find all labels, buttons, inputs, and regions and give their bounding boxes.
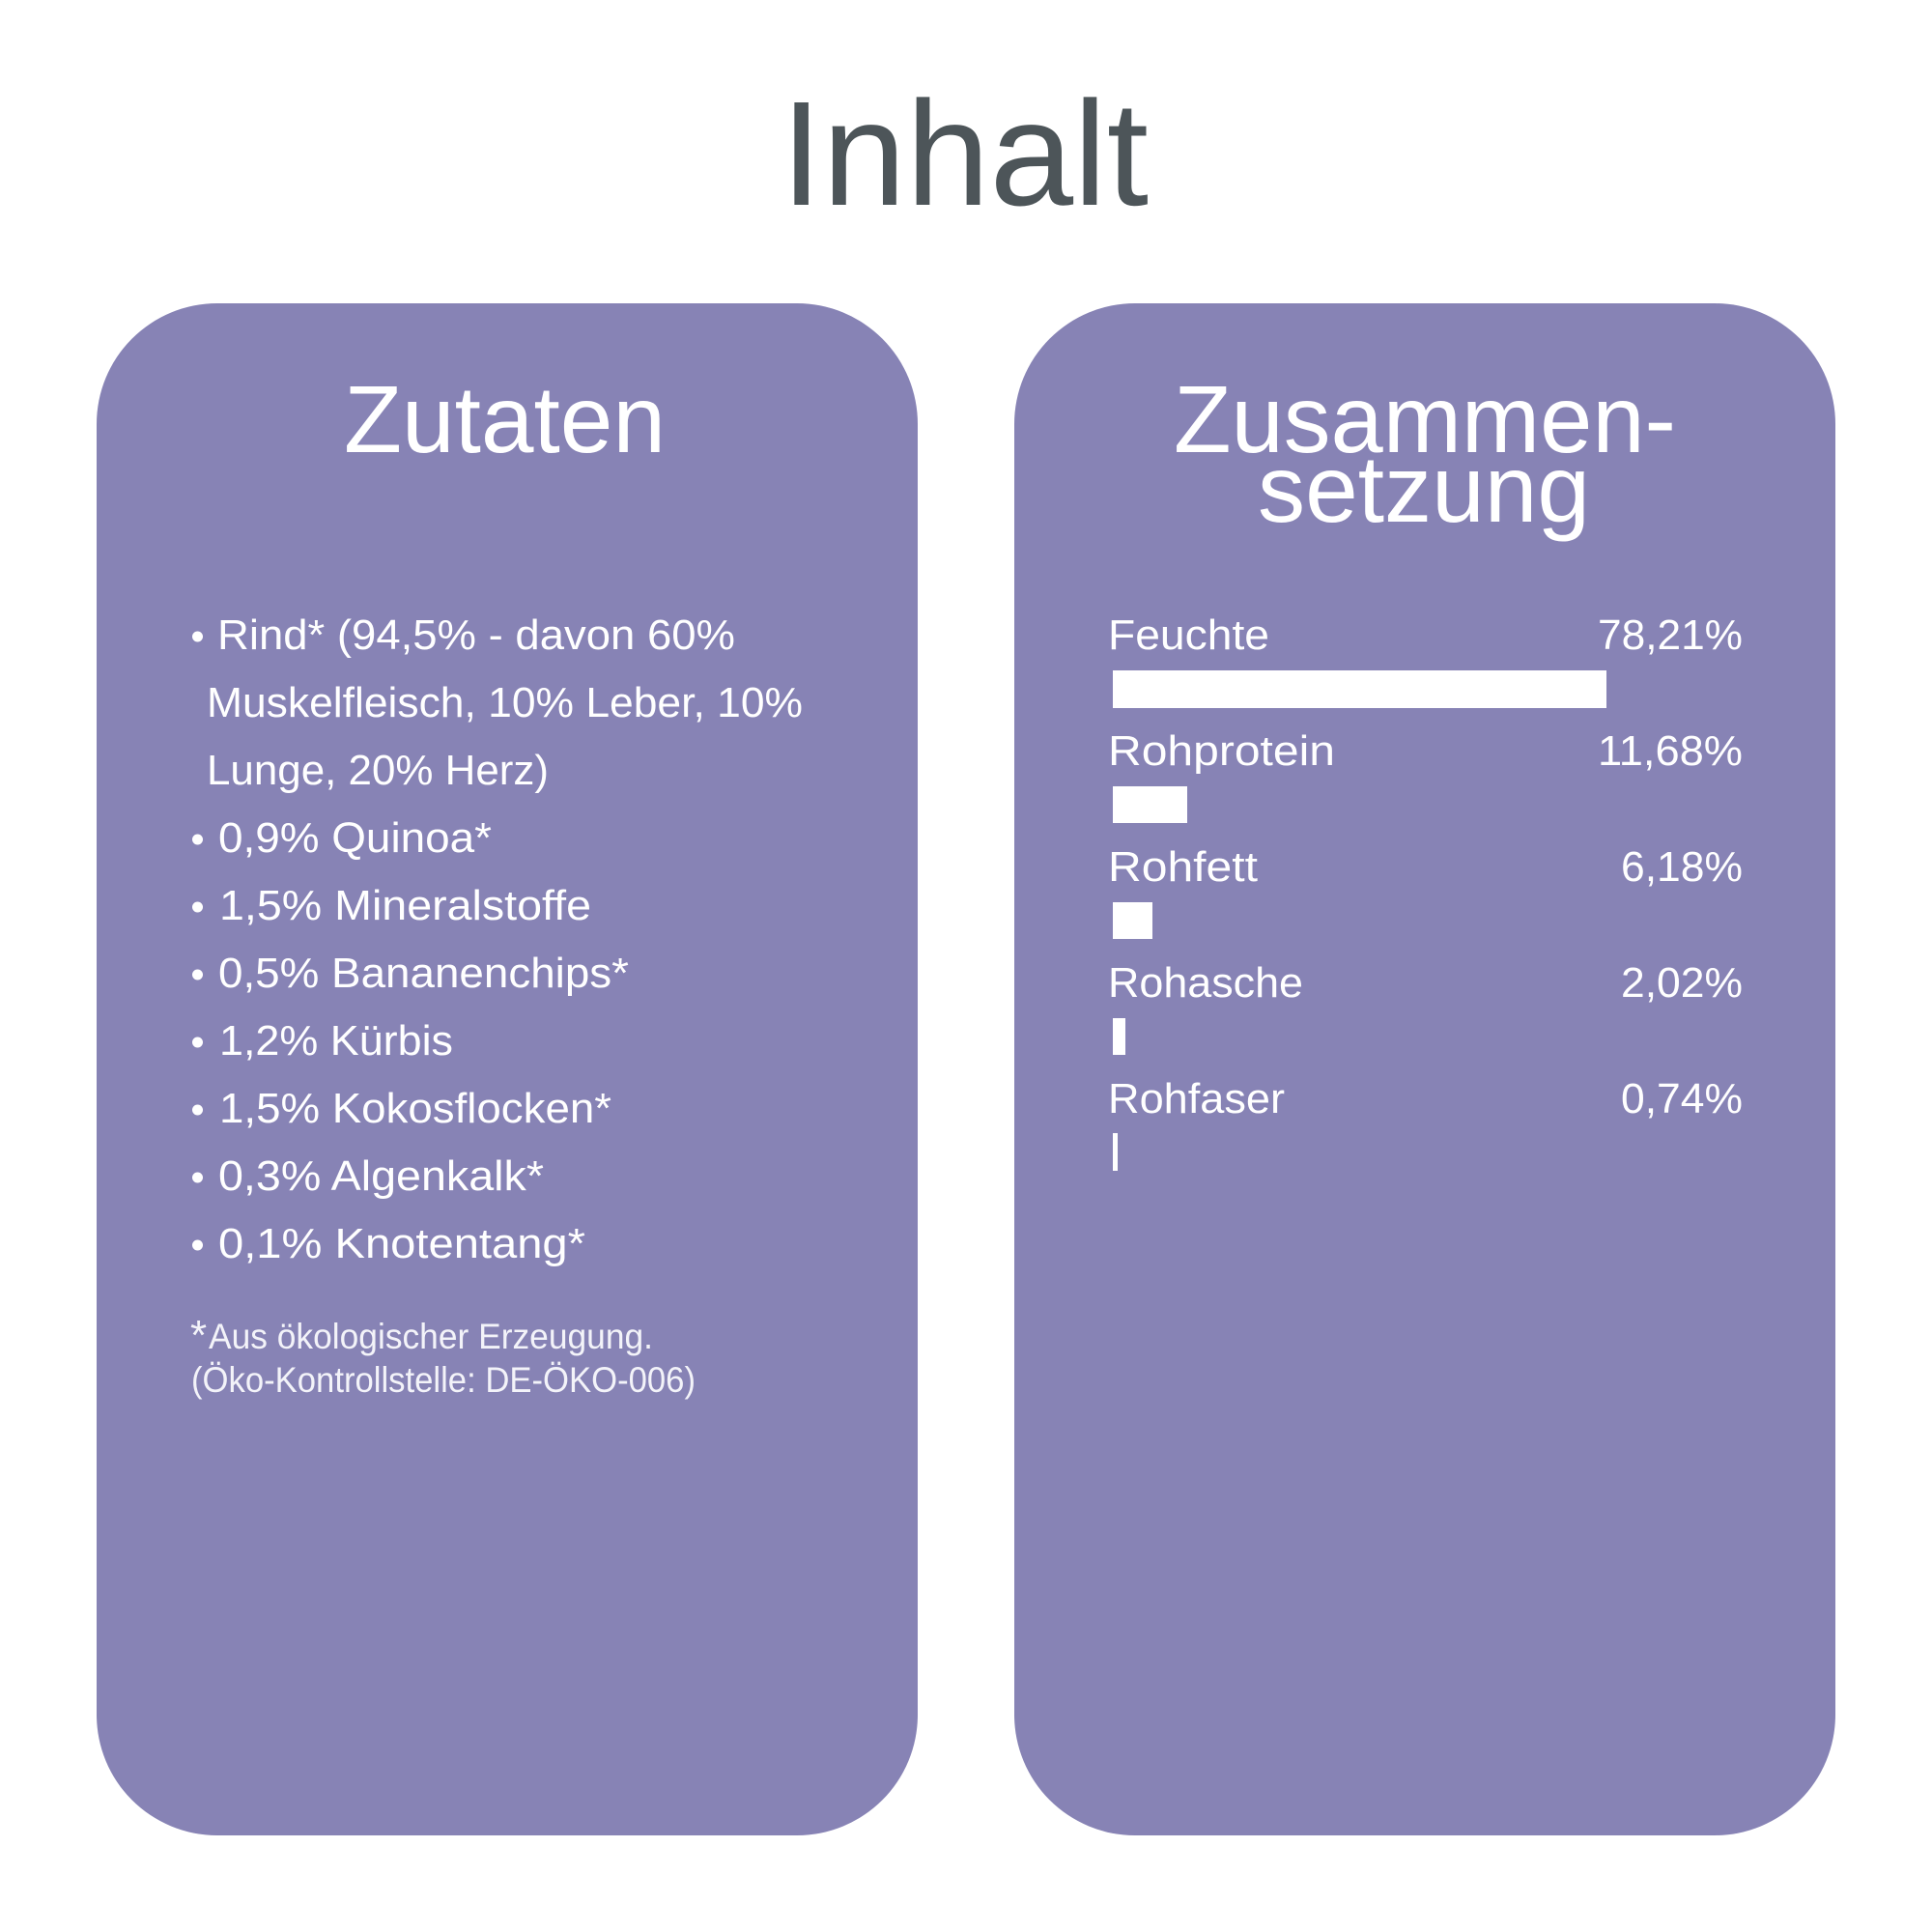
footnote — [190, 1312, 696, 1400]
panel: Zutaten — [97, 303, 918, 1835]
heading: Zusammensetzung: Zusammen- — [1174, 366, 1676, 472]
row: Rohfaser: 0,74% — [1621, 1075, 1743, 1122]
row: Rohprotein — [1108, 727, 1743, 823]
ingredient: Quinoa: 0,9% Quinoa* — [218, 814, 492, 862]
row: Rohfaser — [1108, 1075, 1743, 1171]
footnote: Aus ökologischer Erzeugung. — [209, 1317, 653, 1356]
row: Rohfett: 6,18% — [1621, 843, 1743, 891]
row: Rohasche — [1108, 959, 1743, 1055]
heading: Zutaten: Zutaten — [344, 366, 666, 472]
row: Rohfett: Rohfett — [1108, 843, 1258, 891]
row: Rohprotein: 11,68% — [1598, 727, 1743, 775]
ingredient: Bananenchips: 0,5% Bananenchips* — [218, 950, 629, 997]
ingredient: Rind: Lunge, 20% Herz) — [207, 747, 549, 794]
footnote: (Öko-Kontrollstelle: DE-ÖKO-006) — [191, 1360, 696, 1400]
ingredient: Rind: Rind* (94,5% - davon 60% — [217, 611, 735, 659]
panel background: Zutaten — [97, 303, 918, 1835]
ingredient: Knotentang: 0,1% Knotentang* — [218, 1220, 585, 1267]
ingredient: Mineralstoffe: 1,5% Mineralstoffe — [219, 882, 591, 929]
row: Rohprotein: Rohprotein — [1108, 727, 1335, 775]
heading: Zusammensetzung: setzung — [1258, 436, 1590, 542]
ingredient: Kürbis: 1,2% Kürbis — [219, 1017, 453, 1065]
row: Rohfett — [1108, 843, 1743, 939]
title: Inhalt — [781, 71, 1149, 237]
row: Rohfaser: Rohfaser — [1108, 1075, 1285, 1122]
panel: Zusammensetzung — [1014, 303, 1835, 1835]
row: Rohasche: Rohasche — [1108, 959, 1303, 1007]
panel background: Zusammensetzung — [1014, 303, 1835, 1835]
row: Feuchte: Feuchte — [1108, 611, 1269, 659]
footnote: * — [190, 1312, 207, 1359]
ingredient: Rind — [192, 611, 803, 794]
ingredient list — [192, 611, 803, 1267]
row: Feuchte: 78,21% — [1598, 611, 1743, 659]
bar chart: composition — [1108, 611, 1743, 1171]
row: Feuchte — [1108, 611, 1743, 708]
row: Rohasche: 2,02% — [1621, 959, 1743, 1007]
ingredient: Kokosflocken: 1,5% Kokosflocken* — [219, 1085, 611, 1132]
heading: Zusammensetzung — [1174, 366, 1676, 542]
ingredient: Rind: Muskelfleisch, 10% Leber, 10% — [207, 679, 803, 726]
ingredient: Algenkalk: 0,3% Algenkalk* — [218, 1152, 544, 1200]
